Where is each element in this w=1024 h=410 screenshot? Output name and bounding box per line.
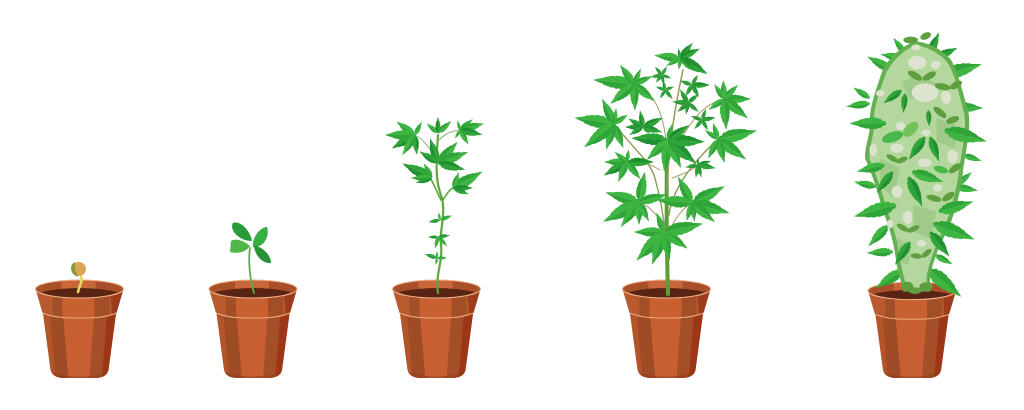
- sprout: [78, 276, 82, 292]
- leaves on top of bud: [849, 87, 989, 267]
- rounded sugar leaves: [881, 31, 963, 294]
- bud pale calyx spots: [869, 44, 958, 247]
- pot 4: [620, 280, 712, 380]
- pot 5: [866, 282, 958, 380]
- pot 1: [34, 280, 126, 380]
- stage 1: germinating seed in pot: [34, 262, 126, 380]
- seed: [71, 262, 86, 277]
- pot 2: [207, 280, 299, 380]
- bud body: [865, 42, 969, 292]
- stage 5: flowering plant with large bud in pot: [846, 31, 989, 380]
- illustration: five growth stages of a plant in pots: [35, 32, 987, 378]
- mature plant leaves: [573, 41, 758, 267]
- bud foliage in reference-scale group: [846, 31, 989, 302]
- pot 3: [390, 280, 482, 380]
- seedling leaves: [230, 222, 271, 263]
- seedling stem: [249, 248, 254, 293]
- stage 3: young plant in pot: [385, 117, 485, 380]
- stage 4: mature vegetative plant in pot: [573, 41, 758, 380]
- bud mid-tone patches: [880, 75, 957, 265]
- outer leaves behind bud: [846, 31, 984, 302]
- stage 2: seedling in pot: [207, 222, 299, 380]
- young plant leaves: [385, 117, 485, 265]
- mature plant stems: [614, 70, 724, 294]
- young plant stems: [415, 130, 460, 293]
